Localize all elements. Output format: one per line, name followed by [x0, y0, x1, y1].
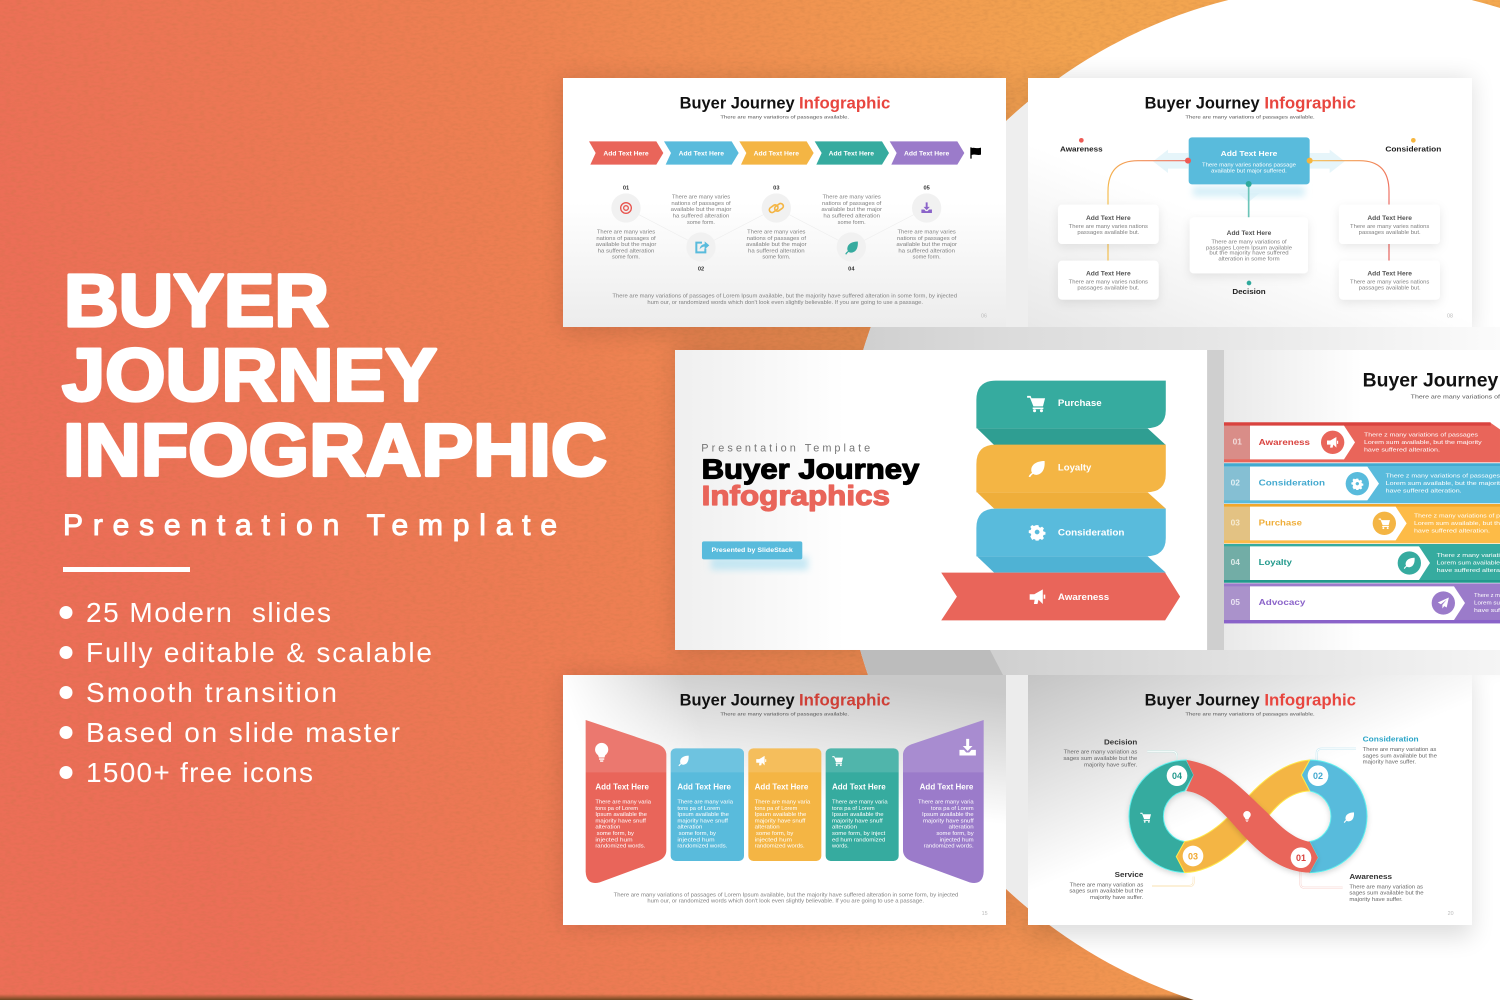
subheading: Presentation Template — [63, 509, 557, 542]
footer paragraph: There are many variations of passages of Lorem Ipsum available, but the majority have suffered alteration in some form, by injected — [614, 892, 958, 898]
step descriptions: available but the major — [671, 207, 732, 213]
slide shadows — [563, 78, 1500, 937]
row: awareness: Awareness — [1259, 437, 1310, 447]
row: advocacy: have suf — [1474, 608, 1500, 614]
card text: Add Text Here — [1367, 271, 1412, 278]
card: yellow: There are many varia — [755, 800, 810, 806]
card text: passages available but. — [1359, 230, 1421, 236]
slide title — [680, 691, 890, 717]
step descriptions: There are many varies — [597, 230, 656, 236]
cover title: Buyer Journey — [702, 454, 920, 485]
card: purple — [903, 720, 984, 883]
main heading: INFOGRAPHIC — [63, 408, 607, 492]
chevron row: Add Text Here — [904, 151, 950, 158]
stage: loyalty — [976, 445, 1166, 509]
number badges: 04 — [1172, 771, 1182, 781]
slide title — [1145, 691, 1356, 717]
row: purchase: Lorem sum available, but th — [1414, 521, 1500, 527]
slide title: There are many variations of — [1411, 394, 1500, 400]
card text: There are many variations of — [1211, 239, 1287, 245]
central box — [1189, 137, 1310, 184]
card: teal: Add Text Here — [832, 783, 886, 792]
callout: awareness: sages sum available but the — [1349, 891, 1424, 897]
step numbers: 03 — [773, 185, 779, 191]
row: consideration: Consideration — [1259, 478, 1325, 488]
cards — [1058, 205, 1440, 300]
number badges — [1167, 765, 1328, 868]
row: advocacy: There z m — [1474, 593, 1500, 599]
row: consideration: have suffered alteration. — [1386, 489, 1462, 495]
panel: slide with layered rows, cropped at right edge — [1224, 350, 1500, 650]
row: purchase: have suffered alteration. — [1414, 529, 1491, 535]
card text — [1069, 215, 1430, 292]
footer paragraph — [614, 892, 958, 905]
row: advocacy: 05 — [1231, 597, 1240, 607]
card: red: injected hum — [595, 837, 633, 843]
card: blue: There are many varia — [677, 800, 733, 806]
card: red: randomized words. — [595, 844, 645, 850]
callout: consideration: sages sum available but the — [1363, 753, 1437, 759]
connector arrows — [1147, 749, 1356, 888]
card: purple: injected hum — [940, 837, 974, 843]
callout: service: Service — [1115, 872, 1143, 879]
slide title: Buyer Journey — [1363, 370, 1499, 391]
central box: available but major suffered. — [1211, 169, 1287, 175]
divider bar — [63, 567, 190, 572]
callout: consideration: There are many variation as — [1363, 747, 1437, 753]
card: blue: tons pa of Lorem — [677, 806, 721, 812]
white circle backdrop — [840, 0, 1500, 1000]
stage: consideration: Consideration — [1058, 527, 1124, 537]
cover title: Infographics — [702, 480, 890, 512]
bullet list: Fully editable & scalable — [86, 637, 432, 668]
callout: awareness: Awareness — [1349, 874, 1392, 881]
card: purple: some form, by — [936, 831, 974, 837]
presenter button — [702, 541, 808, 570]
callout: decision — [1063, 739, 1138, 769]
chevron row: Add Text Here — [679, 151, 725, 158]
callout: service: sages sum available but the — [1069, 889, 1143, 895]
presenter button: Presented by SlideStack — [712, 547, 793, 554]
card: blue: Ipsum available the — [677, 812, 729, 818]
row: awareness: Lorem sum available, but the majority — [1364, 440, 1482, 446]
footer paragraph: There are many variations of passages of Lorem Ipsum available, but the majority have suffered alteration in some form, by injected — [612, 294, 957, 300]
connector lines — [1108, 161, 1389, 261]
page number: 20 — [1448, 911, 1454, 917]
card text: There are many varies nations — [1350, 224, 1430, 230]
chevron row: Add Text Here — [603, 151, 649, 158]
row: purchase: There z many variations of p — [1414, 514, 1500, 520]
step numbers: 04 — [848, 267, 855, 273]
card text: passages available but. — [1077, 286, 1139, 292]
row: loyalty — [1224, 544, 1500, 583]
card: red: some form, by — [597, 831, 634, 837]
central box: There many varies nations passage — [1202, 162, 1296, 168]
step descriptions: nations of passages of — [671, 201, 731, 207]
card: red — [586, 720, 666, 883]
card: yellow: injected hum — [755, 837, 793, 843]
footer paragraph — [612, 294, 957, 306]
cover title — [702, 454, 920, 512]
card: blue: alteration — [677, 825, 702, 831]
row: consideration: Lorem sum available, but the majorit — [1386, 481, 1500, 487]
card: yellow — [748, 748, 821, 861]
panel: centre cover slide — [675, 350, 1207, 650]
callout: decision: majority have suffer. — [1084, 763, 1137, 769]
row: loyalty: Loyalty — [1259, 557, 1292, 567]
icon: cart — [1140, 813, 1151, 823]
card text: Add Text Here — [1086, 215, 1131, 222]
row: purchase — [1224, 504, 1500, 543]
chevron row: Add Text Here — [829, 151, 875, 158]
row: consideration: There z many variations of passages — [1386, 474, 1500, 480]
callout: decision: sages sum available but the — [1063, 756, 1137, 762]
card: purple: randomized words. — [924, 844, 974, 850]
card: blue: Add Text Here — [677, 783, 732, 792]
callout: awareness: majority have suffer. — [1349, 897, 1403, 903]
icon: flag — [970, 147, 981, 159]
row: purchase: 03 — [1231, 518, 1240, 528]
card: teal: some form, by inject — [832, 831, 886, 837]
step descriptions: nations of passages of — [822, 201, 882, 207]
callout: consideration: Consideration — [1363, 737, 1419, 744]
bullet list: 25 Modern slides — [86, 597, 331, 628]
card text: There are many varies nations — [1350, 280, 1430, 286]
step descriptions: available but the major — [746, 242, 807, 248]
number badges: 01 — [1296, 853, 1306, 863]
callout: consideration — [1363, 737, 1437, 765]
step numbers — [623, 185, 930, 273]
node dots — [1185, 158, 1313, 187]
step numbers: 01 — [623, 185, 629, 191]
stage labels: Decision — [1232, 287, 1266, 296]
card: red: Ipsum available the — [595, 812, 647, 818]
bullet list: Based on slide master — [86, 717, 400, 748]
page number: 08 — [1447, 314, 1453, 320]
bullet list: Smooth transition — [86, 677, 337, 708]
step descriptions: available but the major — [896, 242, 957, 248]
card: teal: majority have snuff — [832, 818, 883, 824]
main heading: BUYER — [64, 259, 329, 342]
step descriptions: ha suffered alteration — [598, 248, 654, 254]
slide title: Buyer Journey — [1145, 691, 1260, 710]
slide title — [1363, 370, 1500, 400]
card text: passages available but. — [1359, 286, 1421, 292]
slide title: Infographic — [799, 94, 890, 113]
card: teal: words. — [832, 844, 849, 850]
central box: Add Text Here — [1221, 149, 1277, 158]
row: awareness: have suffered alteration. — [1364, 448, 1441, 454]
card text: There are many varies nations — [1069, 280, 1148, 286]
card: red: tons pa of Lorem — [595, 806, 639, 812]
card: red: There are many varia — [595, 800, 651, 806]
step descriptions: some form. — [687, 220, 715, 226]
panel: slide with chevron timeline — [563, 78, 1006, 327]
stage: awareness — [941, 573, 1180, 620]
step descriptions: ha suffered alteration — [673, 213, 729, 219]
slide title — [680, 94, 890, 120]
card: yellow: Ipsum available the — [755, 812, 806, 818]
callout: service: majority have suffer. — [1090, 895, 1143, 901]
bottom dark band — [0, 994, 1210, 1000]
step descriptions: some form. — [762, 255, 790, 261]
card: purple: There are many varia — [918, 800, 974, 806]
step numbers: 02 — [698, 267, 704, 273]
card text: passages Lorem Ipsum available — [1206, 245, 1292, 251]
row: consideration — [1224, 463, 1500, 503]
stacked stages diagram — [941, 381, 1180, 620]
callout: decision: There are many variation as — [1064, 750, 1138, 756]
page number: 06 — [981, 314, 987, 320]
card: yellow: randomized words. — [755, 844, 805, 850]
row: loyalty: 04 — [1231, 557, 1240, 567]
card: yellow: some form, by — [756, 831, 794, 837]
card: teal: ed hum randomized — [832, 837, 885, 843]
card text: Add Text Here — [1227, 230, 1272, 237]
icon: bulb — [1243, 811, 1251, 822]
page number: 15 — [982, 911, 988, 917]
stage: purchase — [976, 381, 1166, 445]
slide title: There are many variations of passages available. — [1185, 114, 1315, 120]
card: blue — [671, 748, 744, 861]
card: blue: injected hum — [677, 837, 715, 843]
slide title: There are many variations of passages available. — [1185, 711, 1315, 717]
card: yellow: majority have snuff — [755, 818, 806, 824]
callout: awareness — [1349, 874, 1424, 903]
stage: awareness: Awareness — [1058, 592, 1109, 602]
card: purple: tons pa of Lorem — [931, 806, 974, 812]
slide title: Infographic — [1264, 94, 1356, 113]
panel: slide with central box and branching cards — [1028, 78, 1472, 327]
row: advocacy: Advocacy — [1259, 597, 1306, 607]
card text: There are many varies nations — [1069, 224, 1148, 230]
card: blue: majority have snuff — [677, 818, 729, 824]
row: loyalty: Lorem sum available — [1437, 561, 1500, 567]
card: teal: There are many varia — [832, 800, 888, 806]
cover subtitle: Presentation Template — [701, 443, 870, 455]
card: teal: Ipsum available the — [832, 812, 884, 818]
left title block — [60, 259, 607, 788]
footer paragraph: hum our, or randomized words which don't look even slightly believable. If you are going to use a passage. — [647, 300, 923, 306]
panel: slide with infinity diagram — [1028, 675, 1472, 925]
card: teal — [826, 748, 899, 861]
stage labels: Consideration — [1385, 144, 1442, 153]
stage: consideration — [976, 509, 1166, 573]
chevron row — [589, 141, 964, 165]
card: purple: Ipsum available the — [922, 812, 974, 818]
card: red: alteration — [595, 825, 620, 831]
row: consideration: 02 — [1231, 478, 1240, 488]
step descriptions: nations of passages of — [747, 236, 807, 242]
card: red: Add Text Here — [595, 783, 650, 792]
card: teal: alteration — [832, 825, 857, 831]
step descriptions: some form. — [838, 220, 866, 226]
footer paragraph: hum our, or randomized words which don't look even slightly believable. If you are going to use a passage. — [647, 899, 924, 905]
grey gaps between slides — [855, 78, 1500, 925]
step descriptions: some form. — [913, 255, 941, 261]
card text: alteration in some form — [1218, 256, 1280, 262]
stage labels — [1060, 138, 1442, 296]
band: red diagonal — [1186, 760, 1318, 873]
step descriptions: ha suffered alteration — [823, 213, 880, 219]
number badges: 02 — [1313, 771, 1323, 781]
card: yellow: Add Text Here — [755, 783, 809, 792]
slide title: Infographic — [1264, 691, 1356, 710]
card text: Add Text Here — [1367, 215, 1412, 222]
card: purple: alteration — [949, 825, 974, 831]
step descriptions: nations of passages of — [596, 236, 656, 242]
row: awareness: 01 — [1233, 437, 1242, 447]
row: awareness: There z many variations of passages — [1364, 433, 1478, 439]
infinity diagram — [1129, 749, 1367, 888]
step circles with icons — [611, 193, 941, 262]
main heading: JOURNEY — [62, 334, 437, 416]
callout: awareness: There are many variation as — [1349, 884, 1423, 890]
slide title: Buyer Journey — [1145, 94, 1260, 113]
step descriptions: ha suffered alteration — [748, 248, 805, 254]
step descriptions: There are many varies — [897, 230, 956, 236]
main heading — [62, 259, 607, 492]
card text: but the majority have suffered — [1209, 251, 1289, 257]
stage: purchase: Purchase — [1058, 398, 1102, 408]
step numbers: 05 — [924, 185, 930, 191]
callout: decision: Decision — [1104, 739, 1137, 746]
loop: teal left — [1129, 760, 1194, 873]
step descriptions: some form. — [612, 255, 640, 261]
step descriptions — [596, 195, 957, 261]
row: loyalty: have suffered altera — [1437, 568, 1500, 574]
panel: slide with five cards — [563, 675, 1006, 925]
card: yellow: alteration — [755, 825, 780, 831]
callout: consideration: majority have suffer. — [1363, 759, 1416, 765]
row: advocacy: Lorem su — [1474, 601, 1500, 607]
slide title: Buyer Journey — [680, 691, 795, 710]
step descriptions: There are many varies — [747, 230, 806, 236]
loop: blue right — [1301, 760, 1367, 873]
row: loyalty: There z many variati — [1437, 553, 1500, 559]
card text: Add Text Here — [1086, 271, 1131, 278]
card text: passages available but. — [1077, 230, 1139, 236]
pale arrows — [1153, 150, 1345, 202]
row: purchase: Purchase — [1259, 518, 1302, 528]
slide title: Infographic — [799, 691, 890, 710]
card: purple: majority have snuff — [923, 818, 974, 824]
chevron row: Add Text Here — [754, 151, 800, 158]
step descriptions: There are many varies — [672, 195, 731, 201]
stage: loyalty: Loyalty — [1058, 462, 1092, 472]
callout: service: There are many variation as — [1070, 882, 1144, 888]
slide title: Buyer Journey — [680, 94, 795, 113]
card: blue: randomized words. — [677, 844, 727, 850]
step descriptions: There are many varies — [822, 195, 881, 201]
row: awareness — [1224, 422, 1500, 462]
step descriptions: ha suffered alteration — [898, 248, 955, 254]
callout: service — [1069, 872, 1144, 901]
card: red: majority have snuff — [595, 818, 647, 824]
number badges: 03 — [1188, 851, 1198, 861]
bullet list — [60, 597, 432, 788]
step descriptions: available but the major — [821, 207, 882, 213]
bullet list: 1500+ free icons — [86, 757, 313, 788]
step descriptions: available but the major — [596, 242, 657, 248]
band: yellow diagonal — [1176, 760, 1310, 873]
slide title: There are many variations of passages available. — [720, 711, 849, 717]
card: purple: Add Text Here — [920, 783, 974, 792]
card: teal: tons pa of Lorem — [832, 806, 875, 812]
icon: leaf — [1344, 812, 1354, 823]
stage labels: Awareness — [1060, 144, 1103, 153]
step descriptions: nations of passages of — [897, 236, 957, 242]
row: advocacy — [1224, 583, 1500, 623]
slide title — [1145, 94, 1356, 120]
card: yellow: tons pa of Lorem — [755, 806, 798, 812]
card: blue: some form, by — [679, 831, 716, 837]
slide title: There are many variations of passages available. — [720, 114, 849, 120]
